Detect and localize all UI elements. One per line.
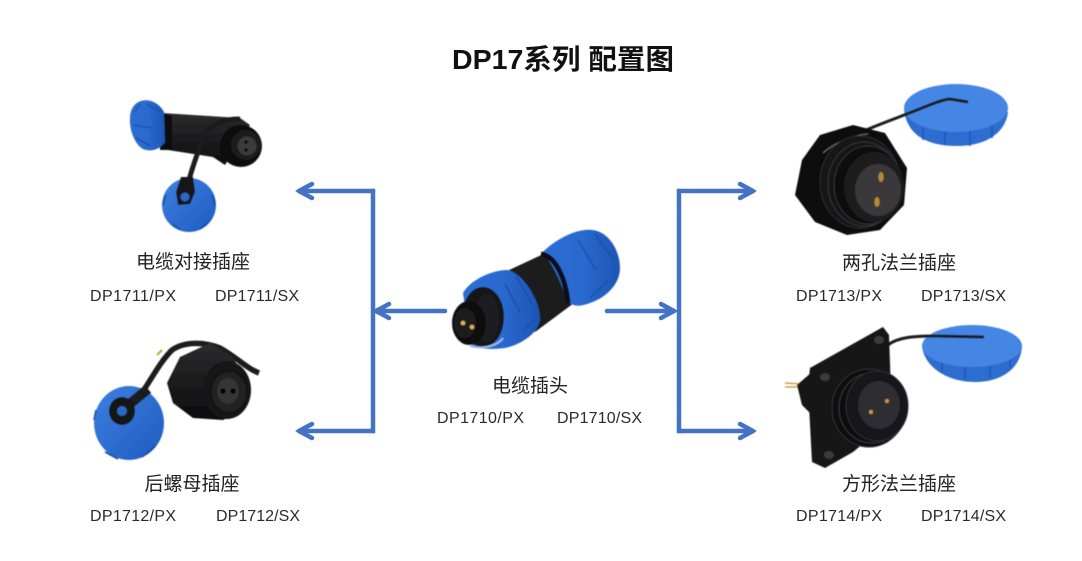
label: square flange socket: DP1714/SX <box>921 508 1006 525</box>
label: inline cable socket: 电缆对接插座 <box>136 251 250 273</box>
label: cable plug: 电缆插头 <box>492 375 568 397</box>
label: rear nut socket: DP1712/PX <box>90 508 176 525</box>
label: two-hole flange socket: 两孔法兰插座 <box>842 252 956 274</box>
product: rear nut socket <box>94 343 259 460</box>
label: inline cable socket: DP1711/SX <box>215 288 299 305</box>
label: two-hole flange socket: DP1713/SX <box>921 288 1006 305</box>
product: square flange socket <box>785 325 1022 468</box>
label: rear nut socket: DP1712/SX <box>216 508 300 525</box>
label: two-hole flange socket <box>796 252 1006 305</box>
arrows: right branch <box>607 184 756 438</box>
label: square flange socket <box>796 473 1006 525</box>
label: cable plug <box>437 375 642 427</box>
label: rear nut socket <box>90 473 300 525</box>
arrows: left branch <box>296 184 445 438</box>
label: inline cable socket <box>90 251 299 305</box>
label: cable plug: DP1710/SX <box>557 410 642 427</box>
label: rear nut socket: 后螺母插座 <box>144 473 240 495</box>
product: two-hole flange socket <box>795 84 1008 235</box>
label: two-hole flange socket: DP1713/PX <box>796 288 882 305</box>
label: square flange socket: 方形法兰插座 <box>842 473 956 495</box>
title: DP17系列 配置图 <box>452 44 674 75</box>
product: inline cable socket <box>130 100 262 232</box>
label: cable plug: DP1710/PX <box>437 410 524 427</box>
product: cable plug <box>452 230 620 349</box>
label: square flange socket: DP1714/PX <box>796 508 882 525</box>
label: inline cable socket: DP1711/PX <box>90 288 176 305</box>
